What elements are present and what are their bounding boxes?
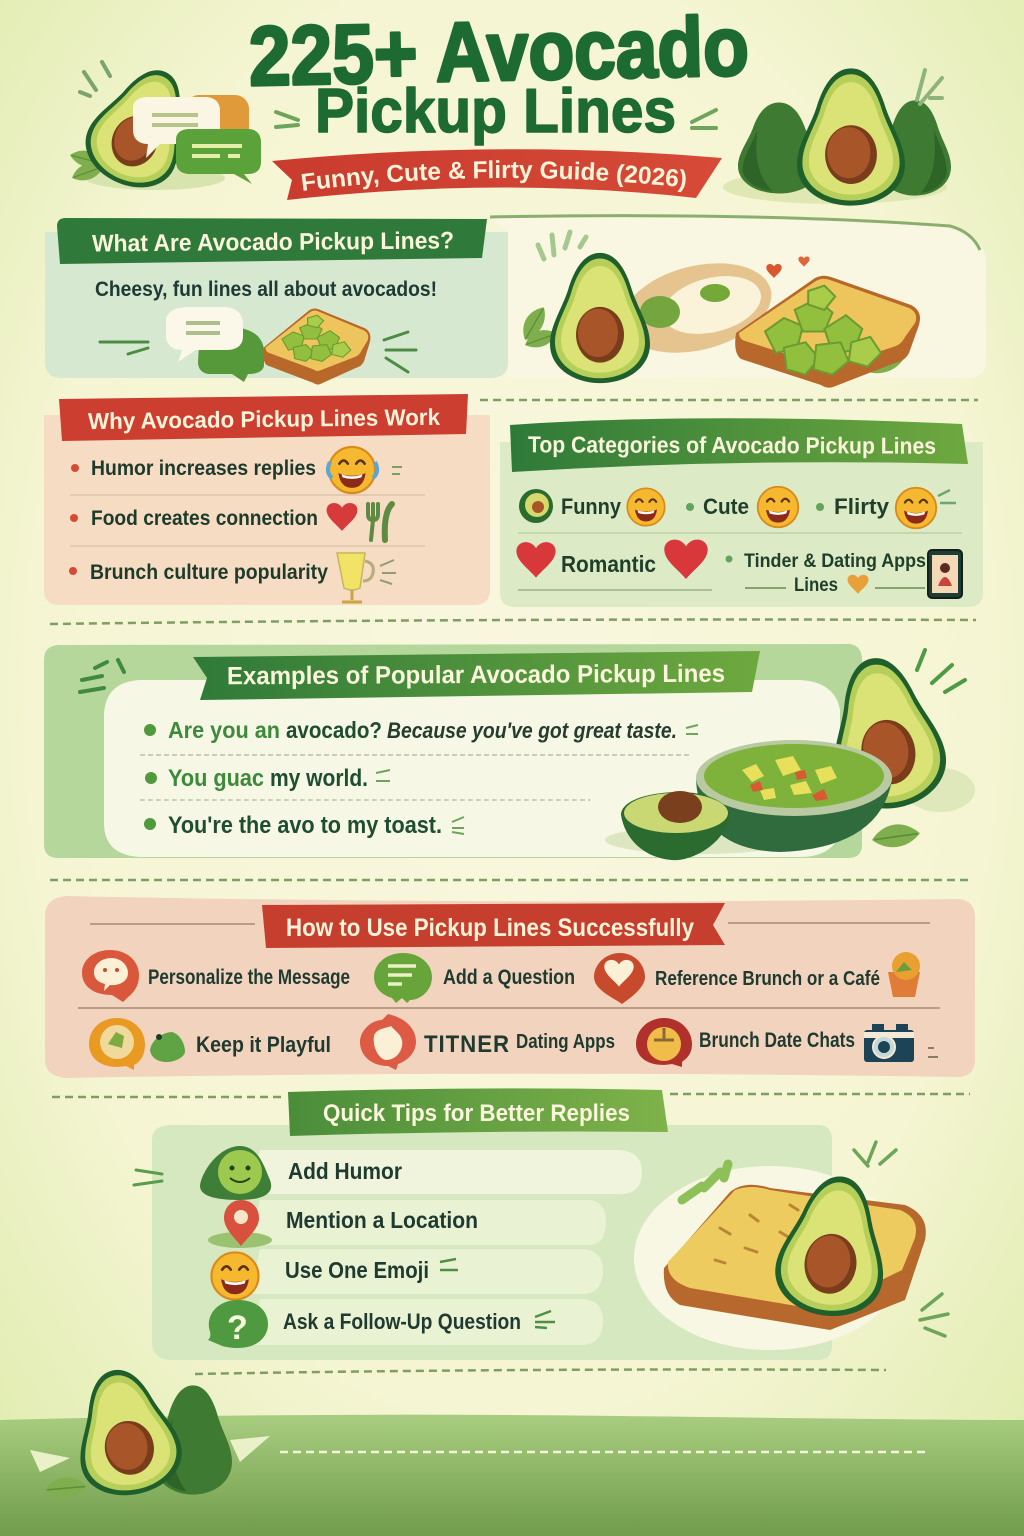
heading ribbon <box>262 903 725 948</box>
divider <box>480 399 978 401</box>
tip: dating apps: Dating Apps <box>516 1031 615 1053</box>
example line 2: You guac <box>168 765 264 792</box>
title: Pickup Lines <box>315 77 676 146</box>
panel: what are avocado pickup lines (illustration) <box>490 216 986 388</box>
divider <box>50 620 976 624</box>
tip: use one emoji <box>211 1252 458 1300</box>
tip: follow-up question: ? <box>227 1309 248 1347</box>
subtitle ribbon <box>272 149 722 200</box>
tip: reference brunch <box>594 952 920 1004</box>
text block: Cheesy, fun lines all about avocados! <box>95 278 437 301</box>
tip: brunch date chats: Brunch Date Chats <box>699 1029 855 1052</box>
example line 1: Because you've got great taste. <box>387 718 677 743</box>
tip: add a question: Add a Question <box>443 966 575 989</box>
tip: mention a location <box>208 1200 478 1248</box>
example line 1: Are you an <box>168 717 280 743</box>
tip: dating apps <box>360 1014 615 1070</box>
category: funny: Funny <box>561 494 622 519</box>
subtitle ribbon: Funny, Cute & Flirty Guide (2026) <box>302 160 686 192</box>
tip: add humor <box>134 1146 402 1200</box>
tip: personalize <box>82 950 350 1002</box>
icon: avocado with guacamole bowl <box>605 649 975 860</box>
panel: examples <box>44 644 975 860</box>
heading ribbon <box>193 651 760 700</box>
divider <box>195 1370 886 1374</box>
list item: humor <box>71 447 402 493</box>
heading ribbon: Why Avocado Pickup Lines Work <box>88 404 440 434</box>
heading ribbon <box>57 218 487 264</box>
category: flirty: Flirty <box>834 494 890 519</box>
tip: mention a location: Mention a Location <box>286 1207 478 1233</box>
list item: food <box>70 503 392 540</box>
heading ribbon <box>288 1088 668 1136</box>
category: cute <box>686 487 798 527</box>
tip: keep it playful <box>89 1018 331 1070</box>
heading ribbon: What Are Avocado Pickup Lines? <box>92 227 454 258</box>
title: 225+ Avocado <box>248 0 750 103</box>
title flourishes <box>276 110 716 128</box>
tip: brunch date chats <box>636 1018 938 1067</box>
title <box>248 0 750 146</box>
tip: use one emoji: Use One Emoji <box>285 1257 429 1283</box>
tip: add a question <box>374 953 575 1003</box>
example line 1: avocado? <box>286 717 382 743</box>
panel: top categories <box>500 418 983 607</box>
category: cute: Cute <box>703 494 749 519</box>
footer hill <box>0 1415 1024 1536</box>
category: romantic: Romantic <box>561 551 656 577</box>
list item: food: Food creates connection <box>91 507 318 530</box>
example line 3: You're the avo to my toast. <box>168 812 442 839</box>
heading ribbon: How to Use Pickup Lines Successfully <box>286 914 694 942</box>
heading ribbon: Quick Tips for Better Replies <box>323 1100 630 1127</box>
icon: three avocados <box>723 68 951 206</box>
tip: follow-up question: Ask a Follow-Up Question <box>283 1309 521 1334</box>
tip: keep it playful: Keep it Playful <box>196 1032 331 1057</box>
category: funny <box>519 488 665 526</box>
heading ribbon <box>510 418 968 472</box>
tip: dating apps: TITNER <box>424 1031 510 1058</box>
panel: why avocado pickup lines work <box>44 394 490 605</box>
icon: footer avocados <box>30 1360 270 1504</box>
category: tinder and dating apps: Tinder & Dating Apps <box>744 551 926 572</box>
example line 2: my world. <box>270 765 368 792</box>
divider <box>52 1094 970 1097</box>
list item: brunch: Brunch culture popularity <box>90 561 328 584</box>
category: romantic <box>516 540 712 590</box>
example line 2 <box>145 765 390 792</box>
heading ribbon: Examples of Popular Avocado Pickup Lines <box>227 660 725 690</box>
category: tinder and dating apps: Lines <box>794 575 838 596</box>
list item: humor: Humor increases replies <box>91 457 316 480</box>
icon: avocado with chat bubbles <box>68 53 261 201</box>
tip: add humor: Add Humor <box>288 1158 402 1184</box>
divider <box>50 879 970 881</box>
category: tinder and dating apps <box>726 550 962 598</box>
heading ribbon: Top Categories of Avocado Pickup Lines <box>528 431 936 459</box>
panel: quick tips <box>134 1088 948 1360</box>
icon: chat and toast <box>100 307 416 385</box>
list item: brunch <box>69 553 396 602</box>
tip: follow-up question <box>208 1300 555 1348</box>
icon: toast with avocado <box>634 1142 948 1350</box>
category: flirty <box>816 488 956 528</box>
tip: personalize: Personalize the Message <box>148 966 350 989</box>
panel: what are avocado pickup lines <box>45 218 508 385</box>
panel: how to use pickup lines <box>45 896 975 1078</box>
heading ribbon <box>59 394 468 441</box>
example line 1 <box>144 717 698 743</box>
tip: reference brunch: Reference Brunch or a Café <box>655 968 880 990</box>
